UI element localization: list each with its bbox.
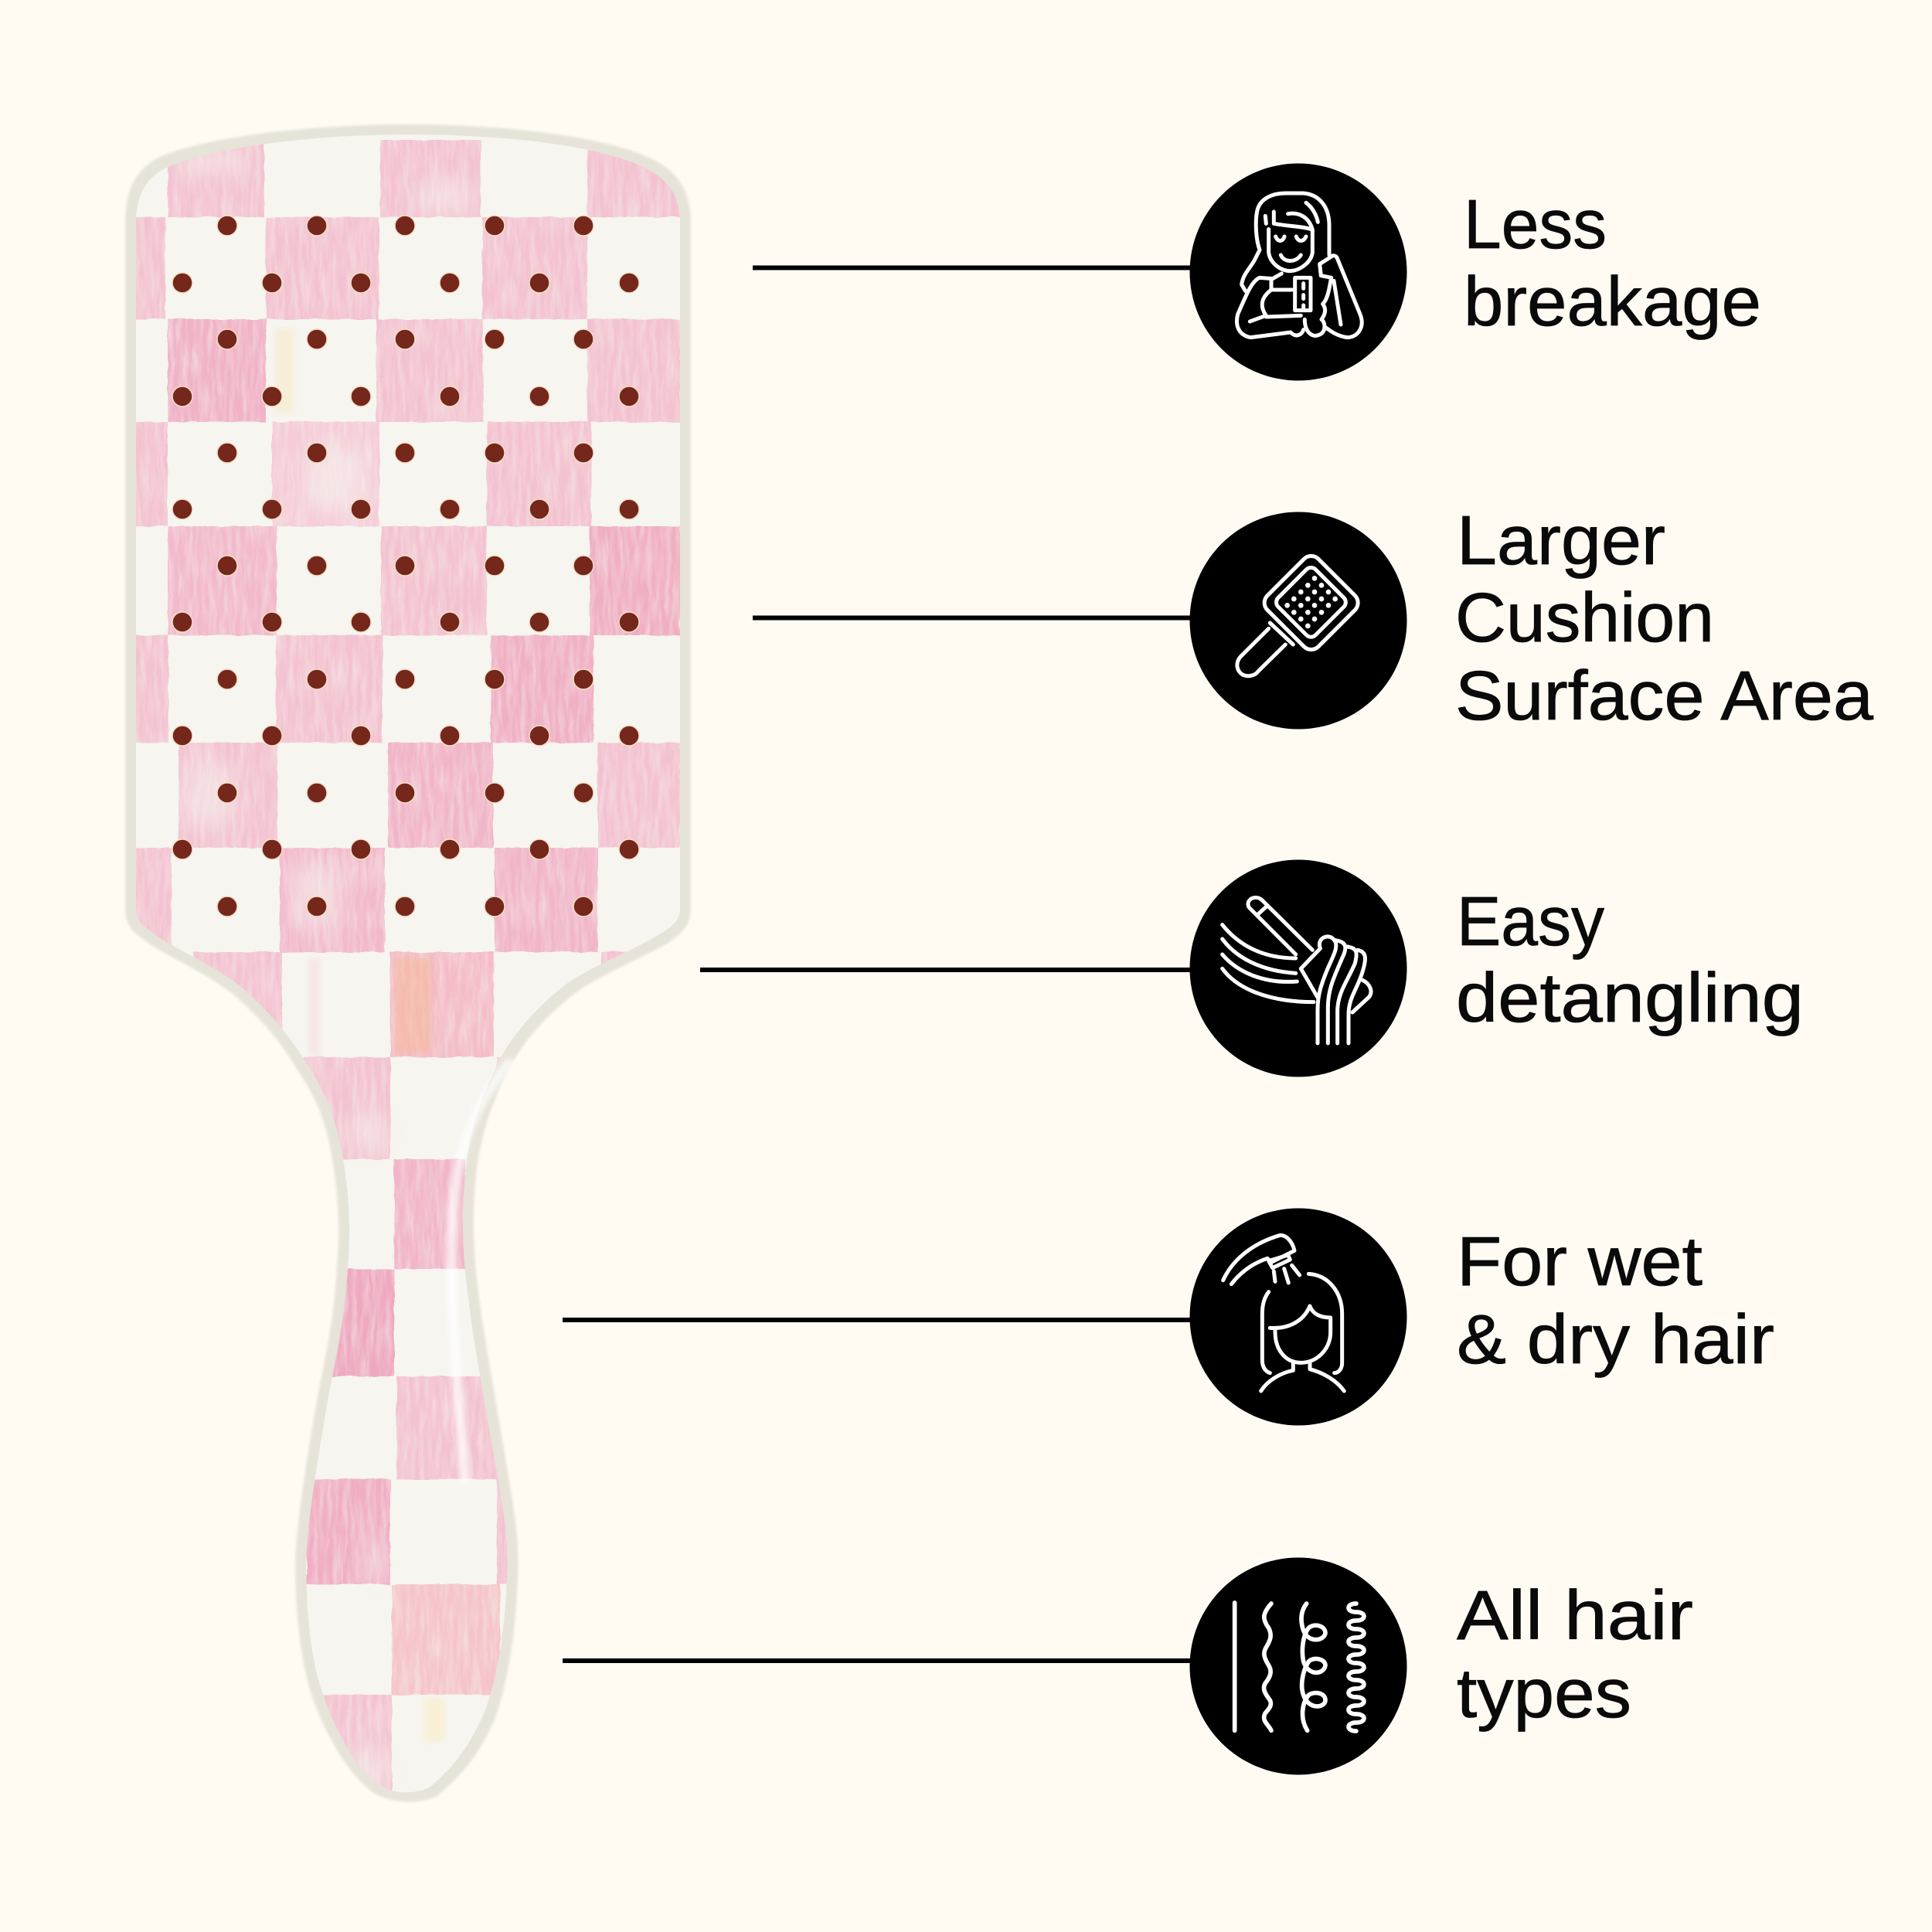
label: less breakage xyxy=(1464,186,1761,341)
label: all hair types: All hair xyxy=(1457,1577,1693,1655)
label: less breakage: Less xyxy=(1464,186,1607,264)
handle highlight xyxy=(451,1060,512,1484)
icon circle 5 xyxy=(1190,1558,1406,1774)
connector line 5 xyxy=(563,1658,1206,1663)
watercolour fades xyxy=(178,151,471,1793)
icon: hair types xyxy=(1235,1603,1364,1731)
callout 3: easy detangling xyxy=(700,859,1804,1077)
checker pattern xyxy=(131,140,680,1804)
label: larger cushion surface area xyxy=(1455,502,1874,735)
callout 4: for wet and dry hair xyxy=(563,1209,1774,1425)
label: larger cushion surface area: Surface Area xyxy=(1455,658,1874,735)
paddle brush xyxy=(125,124,691,1804)
label: easy detangling xyxy=(1456,883,1804,1037)
connector line 4 xyxy=(563,1318,1206,1322)
label: easy detangling: Easy xyxy=(1457,883,1604,961)
icon circle 4 xyxy=(1190,1209,1406,1425)
brush rim xyxy=(125,124,691,1802)
label: larger cushion surface area: Larger xyxy=(1457,502,1665,580)
label: for wet and dry hair: & dry hair xyxy=(1457,1301,1774,1379)
callout 5: all hair types xyxy=(563,1558,1693,1774)
icon circle 1 xyxy=(1190,164,1406,380)
label: for wet and dry hair: For wet xyxy=(1457,1223,1702,1301)
icon: shower over woman xyxy=(1223,1235,1344,1391)
label: all hair types xyxy=(1457,1577,1693,1733)
bristle holes xyxy=(172,216,639,917)
connector line 2 xyxy=(753,615,1206,620)
label: less breakage: breakage xyxy=(1464,264,1761,341)
label: larger cushion surface area: Cushion xyxy=(1455,580,1714,657)
icon circle 2 xyxy=(1190,512,1406,730)
connector line 1 xyxy=(753,266,1206,270)
icon circle 3 xyxy=(1190,859,1406,1077)
callout 2: larger cushion surface area xyxy=(753,502,1874,735)
connector line 3 xyxy=(700,968,1206,972)
icon: paddle brush xyxy=(1237,552,1362,676)
label: for wet and dry hair xyxy=(1457,1223,1774,1379)
icon: hand detangling hair xyxy=(1223,897,1371,1043)
label: easy detangling: detangling xyxy=(1456,960,1804,1037)
paint streaks xyxy=(275,328,445,1741)
label: all hair types: types xyxy=(1457,1655,1631,1733)
brush white base xyxy=(136,134,680,1792)
callout 1: less breakage xyxy=(753,164,1761,380)
icon: woman with comb xyxy=(1237,193,1362,338)
